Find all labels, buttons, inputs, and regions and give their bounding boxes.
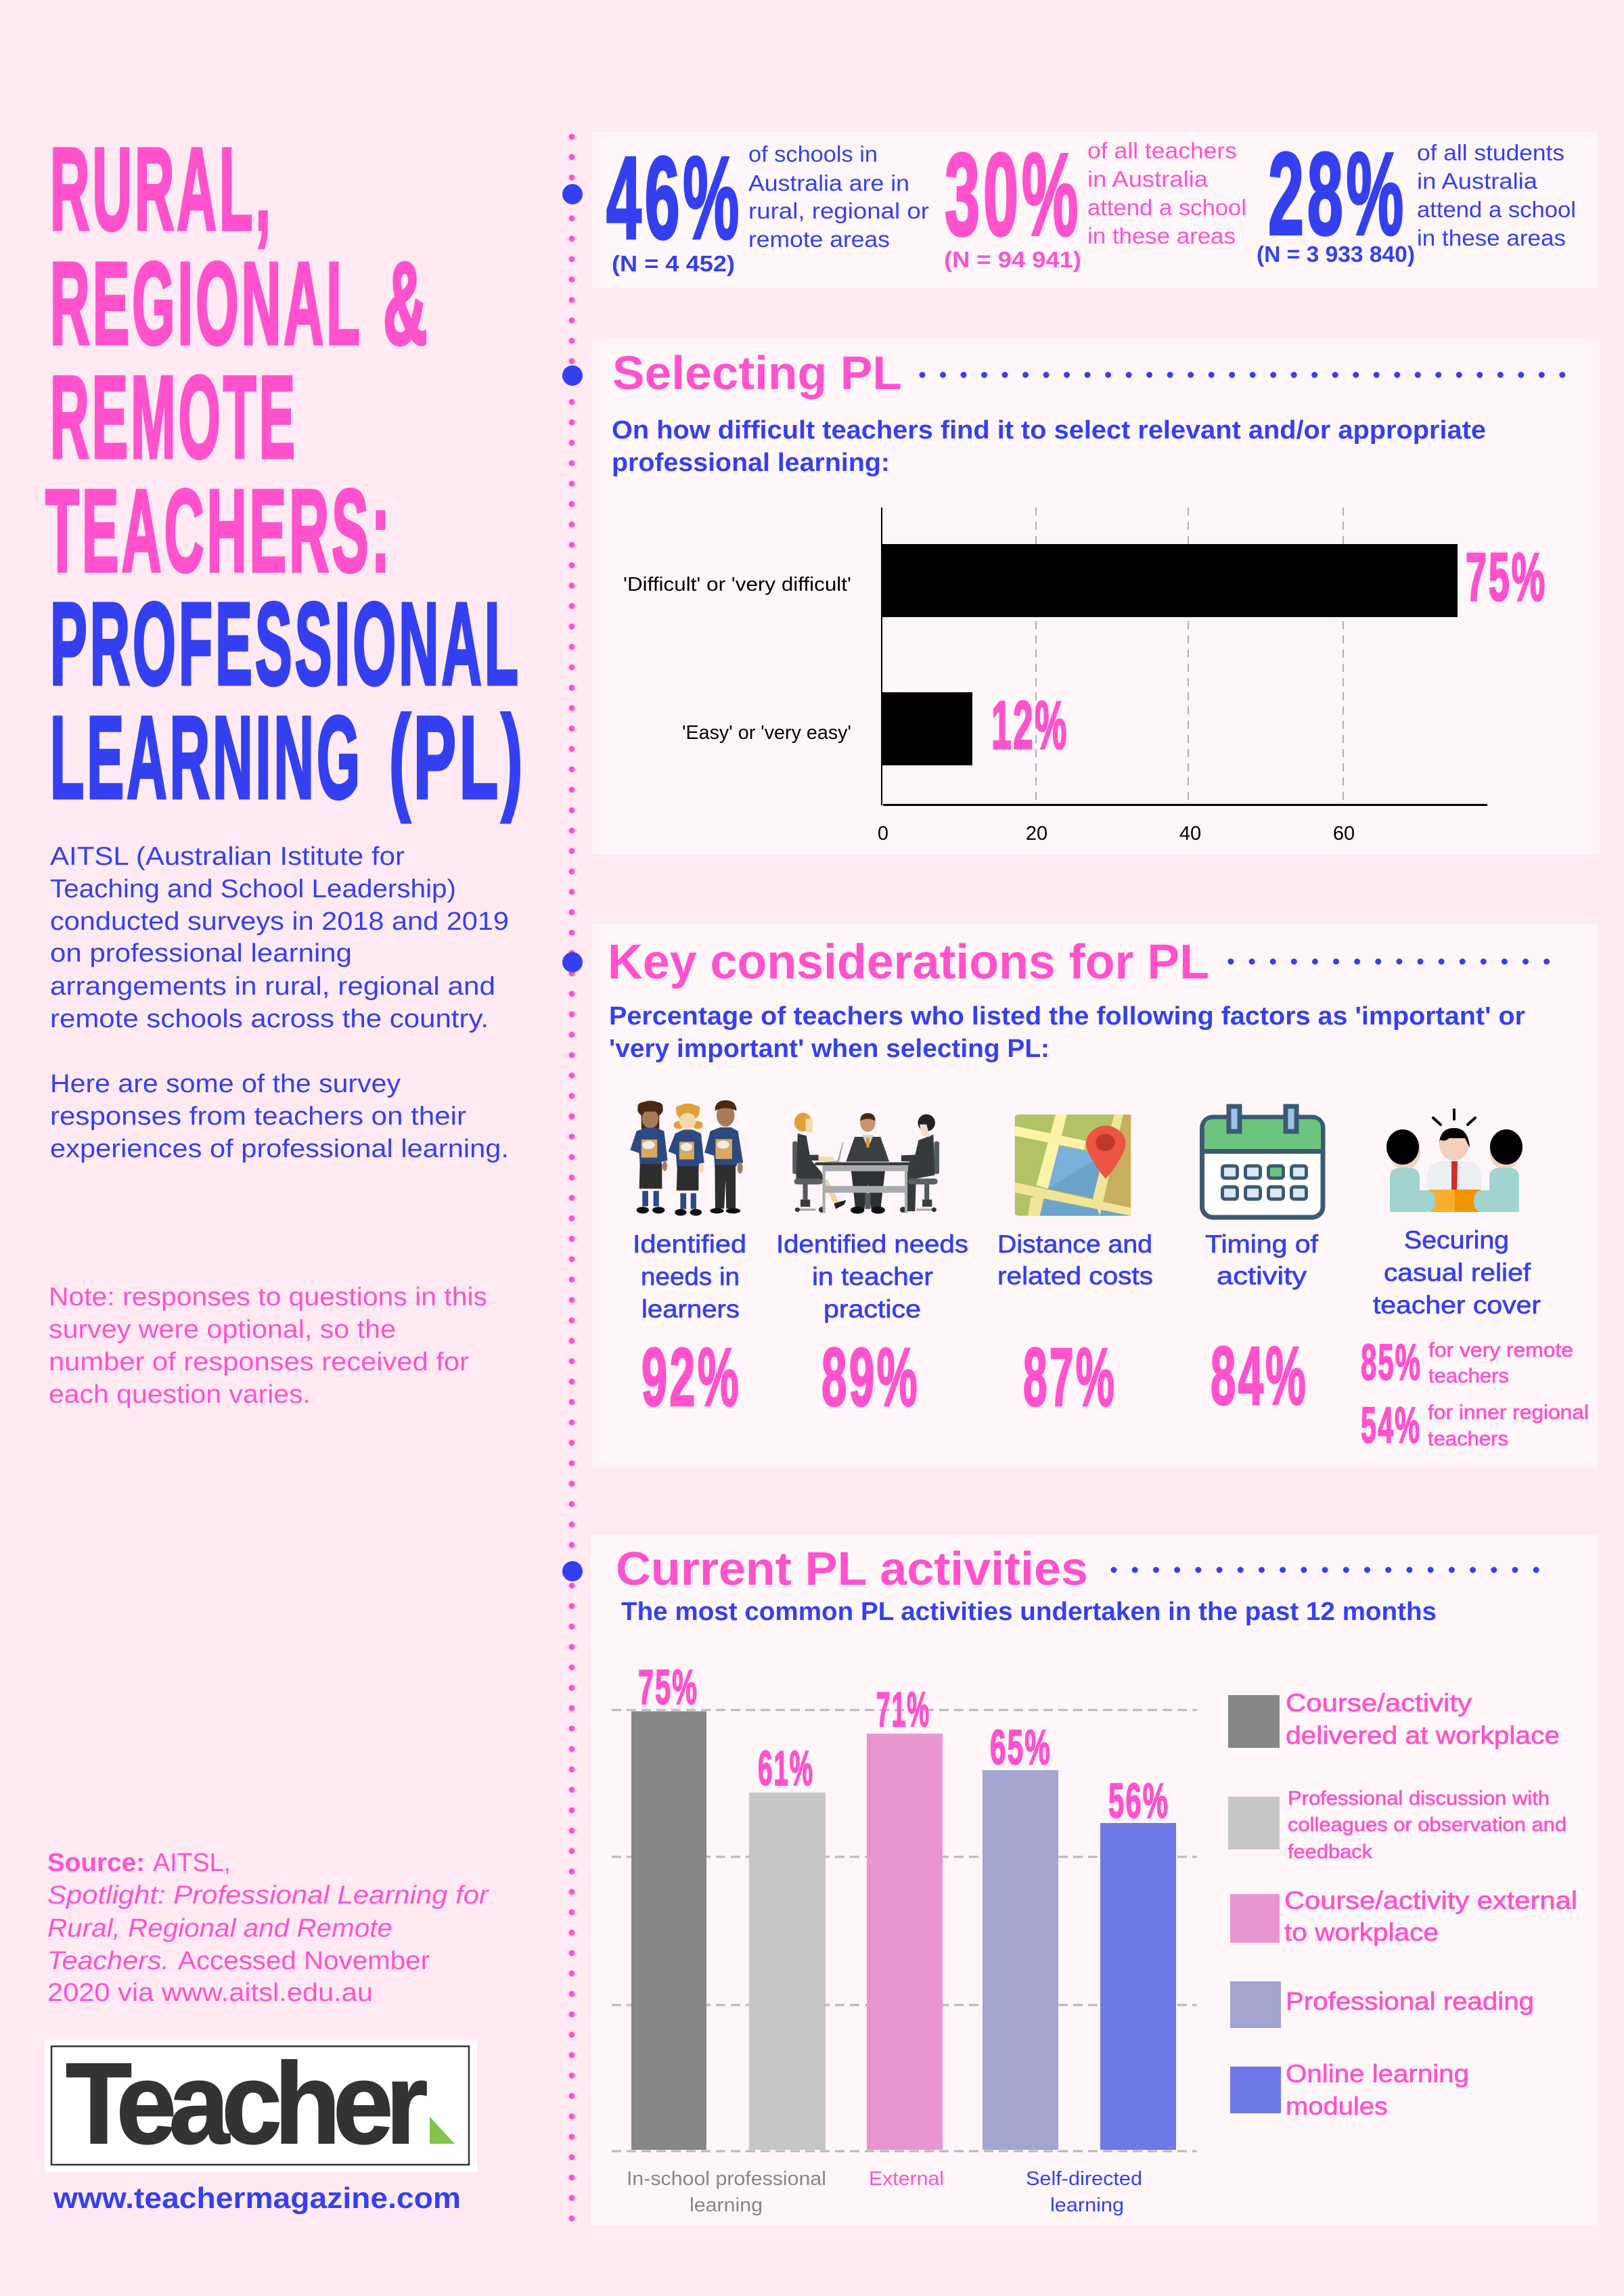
subheading: Percentage of teachers who listed the following factors as 'important' or — [609, 1002, 1525, 1031]
text block: source: Teachers. — [47, 1947, 169, 1975]
text block: introduction: on professional learning — [50, 939, 352, 968]
category label: self-directed: Self-directed — [1026, 2168, 1142, 2190]
legend item: professional reading — [1230, 1981, 1534, 2028]
value: 85% for very remote teachers: teachers — [1428, 1365, 1509, 1387]
axis labels: 40 — [1179, 823, 1201, 845]
category label: in-school — [627, 2168, 826, 2216]
stat: 28% of students: of all students — [1417, 140, 1564, 165]
legend item: online learning modules: Online learning — [1286, 2060, 1469, 2088]
value: 54% for inner regional teachers: for inner regional — [1428, 1401, 1589, 1424]
text block: note: number of responses received for — [49, 1348, 469, 1376]
label: Identified needs — [776, 1230, 968, 1258]
bar: easy 12%: 'Easy' or 'very easy' — [682, 722, 851, 744]
stat: 30% of teachers: 30% — [945, 129, 1081, 260]
axis labels: 20 — [1026, 823, 1047, 845]
category label: in-school: In-school professional — [627, 2168, 826, 2190]
stat: 30% of teachers: (N = 94 941) — [944, 247, 1081, 272]
icon: meeting — [792, 1112, 939, 1214]
text block: source: Spotlight: Professional Learning for — [47, 1881, 489, 1910]
bar: difficult 75%: 'Difficult' or 'very difficult' — [623, 574, 851, 595]
bar chart: difficulty of selecting PL — [623, 508, 1547, 845]
label — [997, 1230, 1153, 1290]
bar: 71%: 71% — [876, 1683, 930, 1737]
heading dots — [1231, 958, 1550, 965]
icon: students — [630, 1100, 743, 1216]
title: REMOTE — [50, 351, 298, 482]
text block: introduction: Here are some of the survey — [50, 1070, 401, 1098]
category label: in-school: learning — [690, 2194, 763, 2216]
title: & — [383, 238, 430, 369]
text block: note: Note: responses to questions in this — [49, 1283, 487, 1311]
stat: 30% of teachers: in these areas — [1087, 223, 1236, 248]
legend item: professional discussion: Professional discussion with — [1288, 1788, 1550, 1809]
text block: introduction: conducted surveys in 2018 and 2019 — [50, 907, 509, 936]
text block: introduction: Teaching and School Leadership) — [50, 875, 456, 903]
label — [1373, 1226, 1541, 1319]
legend item: delivered at workplace: delivered at workplace — [1286, 1721, 1560, 1749]
text block: note — [49, 1283, 487, 1409]
infographic canvas: PROFESSIONAL — [50, 578, 521, 709]
bar: 61%: 61% — [758, 1742, 814, 1796]
label: related costs — [997, 1262, 1153, 1290]
logo: Teacher: Teacher — [66, 2040, 426, 2168]
bar: 75% — [631, 1661, 706, 2150]
label: needs in — [641, 1263, 740, 1290]
bar: easy 12%: 12% — [991, 688, 1068, 763]
value: 85% for very remote teachers: 85% — [1361, 1334, 1422, 1391]
bar: difficult 75% — [623, 539, 1547, 617]
text block: introduction: responses from teachers on their — [50, 1102, 466, 1131]
stat: 46% of schools: Australia are in — [748, 171, 909, 196]
title: (PL) — [389, 692, 526, 823]
legend item: delivered at workplace: Course/activity — [1286, 1689, 1472, 1717]
value: 54% for inner regional teachers: teachers — [1428, 1428, 1508, 1450]
subheading — [609, 1002, 1525, 1063]
value: 92%: 92% — [641, 1331, 741, 1423]
label: Securing — [1404, 1226, 1509, 1254]
label: practice — [824, 1295, 921, 1323]
stat: 28% of students: in these areas — [1417, 225, 1566, 250]
axis labels — [878, 823, 1355, 845]
stat: 28% of students: 28% — [1268, 128, 1407, 259]
subheading: On how difficult teachers find it to select relevant and/or appropriate — [612, 416, 1486, 445]
value: 89%: 89% — [821, 1331, 920, 1423]
stat: 46% of schools: rural, regional or — [748, 198, 929, 223]
label: Timing of — [1205, 1230, 1319, 1258]
heading: Selecting PL: Selecting PL — [612, 346, 902, 399]
text block: note: each question varies. — [49, 1380, 311, 1409]
value: 54% for inner regional teachers: 54% — [1361, 1397, 1421, 1454]
label: teacher cover — [1373, 1291, 1541, 1319]
timeline: dotted line with markers — [562, 137, 583, 2223]
subheading: professional learning: — [612, 449, 890, 477]
bar: 65% — [983, 1721, 1058, 2150]
value: 54% for inner regional teachers — [1361, 1397, 1589, 1454]
legend item: online learning modules — [1230, 2060, 1469, 2120]
bar: 75%: 75% — [638, 1661, 698, 1715]
text block: introduction: experiences of professional learning. — [50, 1135, 509, 1163]
legend item: professional discussion: feedback — [1288, 1841, 1373, 1863]
heading dots — [1114, 1567, 1538, 1573]
label: activity — [1217, 1262, 1307, 1290]
bar: 71% — [867, 1683, 943, 2150]
stat: 28% of students: (N = 3 933 840) — [1257, 242, 1415, 267]
panel: selecting PL — [592, 339, 1600, 854]
factor: identified needs in learners — [630, 1100, 746, 1423]
website link: www.teachermagazine.com — [53, 2182, 461, 2215]
stat: 46% of schools: of schools in — [748, 141, 878, 166]
label: in teacher — [812, 1263, 933, 1290]
legend item: professional discussion — [1228, 1788, 1566, 1863]
stat: 30% of teachers: attend a school — [1087, 195, 1246, 220]
label: Distance and — [997, 1230, 1152, 1258]
stat: 30% of teachers: in Australia — [1087, 166, 1209, 192]
legend item: professional discussion: colleagues or observation and — [1288, 1814, 1566, 1836]
axis labels: 0 — [878, 823, 888, 845]
label — [1205, 1230, 1319, 1290]
stat: 30% of teachers: of all teachers — [1087, 138, 1237, 163]
category label: external: External — [869, 2168, 944, 2190]
bar: difficult 75%: 75% — [1466, 539, 1547, 615]
axis labels: 60 — [1333, 823, 1355, 845]
panel: left column — [45, 123, 526, 2215]
text block: introduction: arrangements in rural, regional and — [50, 972, 495, 1001]
icon: calendar — [1201, 1106, 1324, 1217]
value: 84%: 84% — [1211, 1330, 1308, 1422]
label: casual relief — [1384, 1259, 1531, 1286]
bar: 61% — [749, 1742, 826, 2150]
title: TEACHERS: — [45, 465, 392, 596]
label — [633, 1230, 746, 1323]
text block: source — [47, 1849, 489, 2007]
factor: distance and related costs — [997, 1115, 1153, 1423]
heading dots — [922, 372, 1567, 378]
stat: 28% of students: in Australia — [1417, 168, 1538, 194]
column chart: PL activities — [612, 1661, 1197, 2216]
heading: Current PL activities: Current PL activities — [616, 1542, 1088, 1595]
icon: three people at a table — [1386, 1110, 1522, 1212]
stat: 46% of schools: (N = 4 452) — [612, 251, 735, 276]
category label: self-directed: learning — [1050, 2194, 1124, 2216]
title: LEARNING — [50, 692, 363, 823]
text block: introduction: remote schools across the country. — [50, 1005, 489, 1033]
legend item: professional reading: Professional reading — [1286, 1987, 1534, 2015]
panel: key considerations — [592, 924, 1598, 1468]
label: Identified — [633, 1230, 746, 1258]
label — [776, 1230, 968, 1323]
legend item: external to workplace — [1230, 1887, 1577, 1946]
bar: easy 12% — [682, 688, 1068, 765]
factor: timing of activity — [1201, 1106, 1324, 1422]
panel: headline statistics — [592, 128, 1598, 288]
value: 85% for very remote teachers: for very remote — [1428, 1339, 1573, 1361]
subheading: The most common PL activities undertaken in the past 12 months — [621, 1598, 1437, 1626]
legend item: online learning modules: modules — [1286, 2092, 1388, 2120]
bar: 56%: 56% — [1108, 1774, 1169, 1828]
text block: introduction — [50, 842, 509, 1163]
title — [45, 123, 526, 823]
text block: source: Rural, Regional and Remote — [47, 1914, 392, 1943]
legend item: external to workplace: to workplace — [1284, 1918, 1439, 1946]
value: 87%: 87% — [1023, 1331, 1116, 1423]
panel: current PL activities — [591, 1535, 1598, 2225]
subheading — [612, 416, 1486, 477]
text block: source: Source: — [47, 1849, 145, 1877]
legend item: external to workplace: Course/activity external — [1284, 1887, 1577, 1914]
text block: note: survey were optional, so the — [49, 1315, 396, 1344]
value: 85% for very remote teachers — [1361, 1334, 1573, 1391]
bar: 56% — [1100, 1774, 1176, 2150]
icon: map with pin — [1015, 1115, 1131, 1216]
text block: source: AITSL, — [153, 1849, 231, 1877]
stat: 28% of students: attend a school — [1417, 197, 1576, 222]
factor: identified needs in teacher practice — [776, 1112, 968, 1423]
heading: Key considerations: Key considerations for PL — [608, 935, 1209, 989]
subheading: 'very important' when selecting PL: — [609, 1035, 1050, 1063]
bar: 65%: 65% — [990, 1721, 1052, 1775]
factor: securing casual relief teacher cover — [1361, 1110, 1589, 1454]
label: learners — [641, 1295, 740, 1323]
text block: source: 2020 via www.aitsl.edu.au — [47, 1979, 373, 2007]
legend — [1228, 1689, 1577, 2120]
title: REGIONAL — [50, 238, 363, 369]
title: RURAL, — [50, 123, 273, 254]
text block: introduction: AITSL (Australian Istitute for — [50, 842, 405, 871]
stat: 46% of schools: remote areas — [748, 227, 890, 252]
legend item: delivered at workplace — [1228, 1689, 1560, 1749]
text block: source: Accessed November — [178, 1947, 430, 1975]
stat: 46% of schools: 46% — [606, 132, 742, 263]
category label: self-directed — [1026, 2168, 1142, 2216]
